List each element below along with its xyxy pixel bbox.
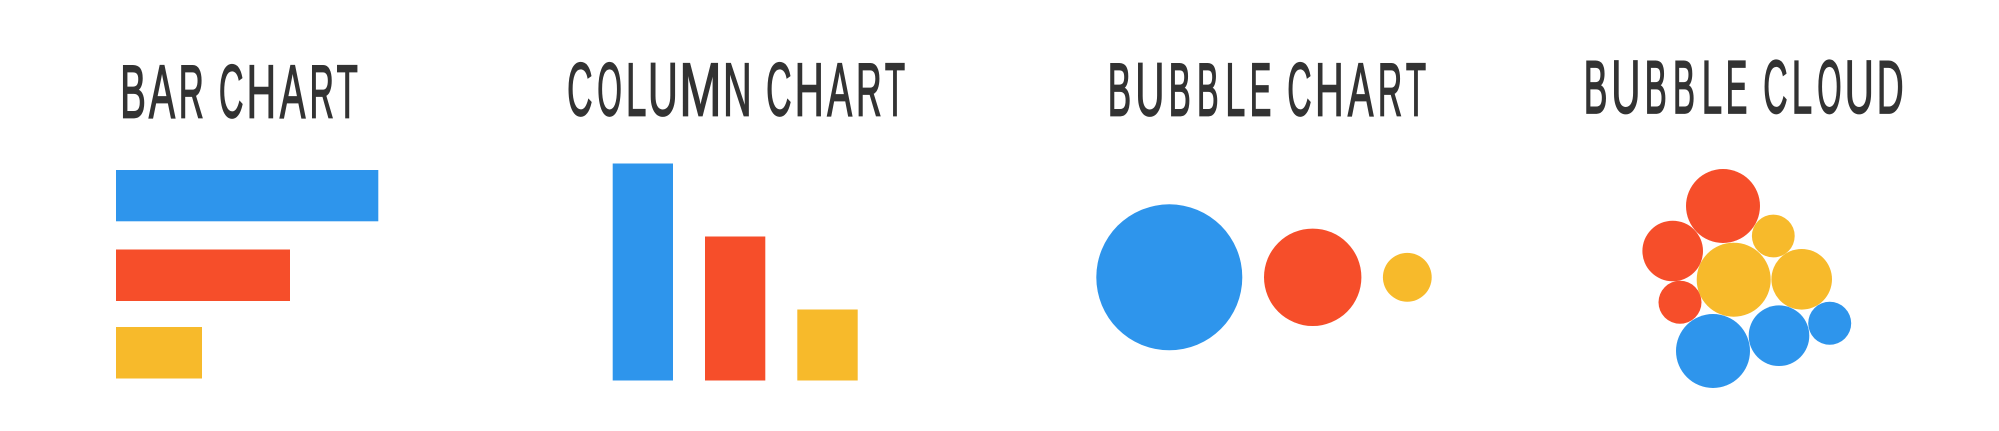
panel: bar chart: T (337, 50, 358, 134)
heading: bubble chart: B (1197, 48, 1219, 132)
heading: bubble cloud: B (1645, 45, 1667, 129)
heading: bubble cloud: C (1763, 45, 1788, 129)
heading: bubble cloud: U (1611, 45, 1640, 129)
panel: bubble chart (1096, 48, 1432, 350)
red bubbles (1642, 169, 1760, 324)
panel: bar chart (116, 50, 378, 378)
panel: bubble cloud (1584, 45, 1904, 388)
heading: column chart: R (856, 48, 882, 132)
heading: bubble chart: E (1250, 48, 1271, 132)
heading: bar chart: A (280, 50, 305, 134)
heading: bubble chart: U (1135, 48, 1164, 132)
heading: bubble chart: R (1378, 48, 1402, 132)
red bubble (1264, 229, 1361, 326)
blue column (613, 164, 673, 380)
heading: column chart: A (827, 48, 852, 132)
blue bubble (1096, 204, 1242, 350)
heading: bar chart: C (219, 50, 244, 134)
yellow bubbles (1697, 215, 1832, 317)
heading: bubble chart: B (1169, 48, 1191, 132)
panel: bubble chart: T (1406, 48, 1426, 132)
heading: bar chart: B (120, 50, 146, 134)
heading: column chart: O (597, 48, 622, 132)
heading: bubble cloud: L (1792, 45, 1812, 129)
heading: column chart: L (626, 48, 646, 132)
heading: bar chart: H (247, 50, 276, 134)
red column (705, 236, 765, 380)
blue bubbles (1676, 302, 1851, 388)
blue bar (116, 170, 378, 221)
heading: bubble cloud: E (1726, 45, 1747, 129)
yellow column (797, 310, 858, 380)
heading: column chart: U (648, 48, 678, 132)
heading: bubble chart: L (1225, 48, 1245, 132)
infographic canvas: D (1877, 45, 1904, 129)
heading: bar chart: A (149, 50, 175, 134)
yellow bubble (1383, 253, 1432, 302)
heading: bubble cloud: B (1584, 45, 1608, 129)
heading: column chart: N (723, 48, 752, 132)
panel: column chart (567, 48, 905, 380)
heading: bubble chart: A (1348, 48, 1373, 132)
heading: column chart: M (679, 48, 722, 132)
heading: bubble chart: H (1315, 48, 1344, 132)
heading: bubble chart: B (1108, 48, 1131, 132)
red bar (116, 250, 290, 301)
heading: column chart: C (567, 48, 592, 132)
horizontal bars (116, 170, 378, 378)
heading: bubble cloud: O (1817, 45, 1842, 129)
yellow bar (116, 327, 202, 378)
vertical columns (613, 164, 858, 380)
infographic canvas: T (885, 48, 905, 132)
heading: bar chart: R (179, 50, 204, 134)
heading: column chart: H (795, 48, 824, 132)
heading: bar chart: R (310, 50, 334, 134)
heading: bubble chart: C (1287, 48, 1312, 132)
heading: column chart: C (766, 48, 792, 132)
heading: bubble cloud: L (1702, 45, 1722, 129)
bubbles in a row (1096, 204, 1432, 350)
clustered bubbles (1642, 169, 1851, 388)
heading: bubble cloud: B (1673, 45, 1695, 129)
heading: bubble cloud: U (1845, 45, 1874, 129)
